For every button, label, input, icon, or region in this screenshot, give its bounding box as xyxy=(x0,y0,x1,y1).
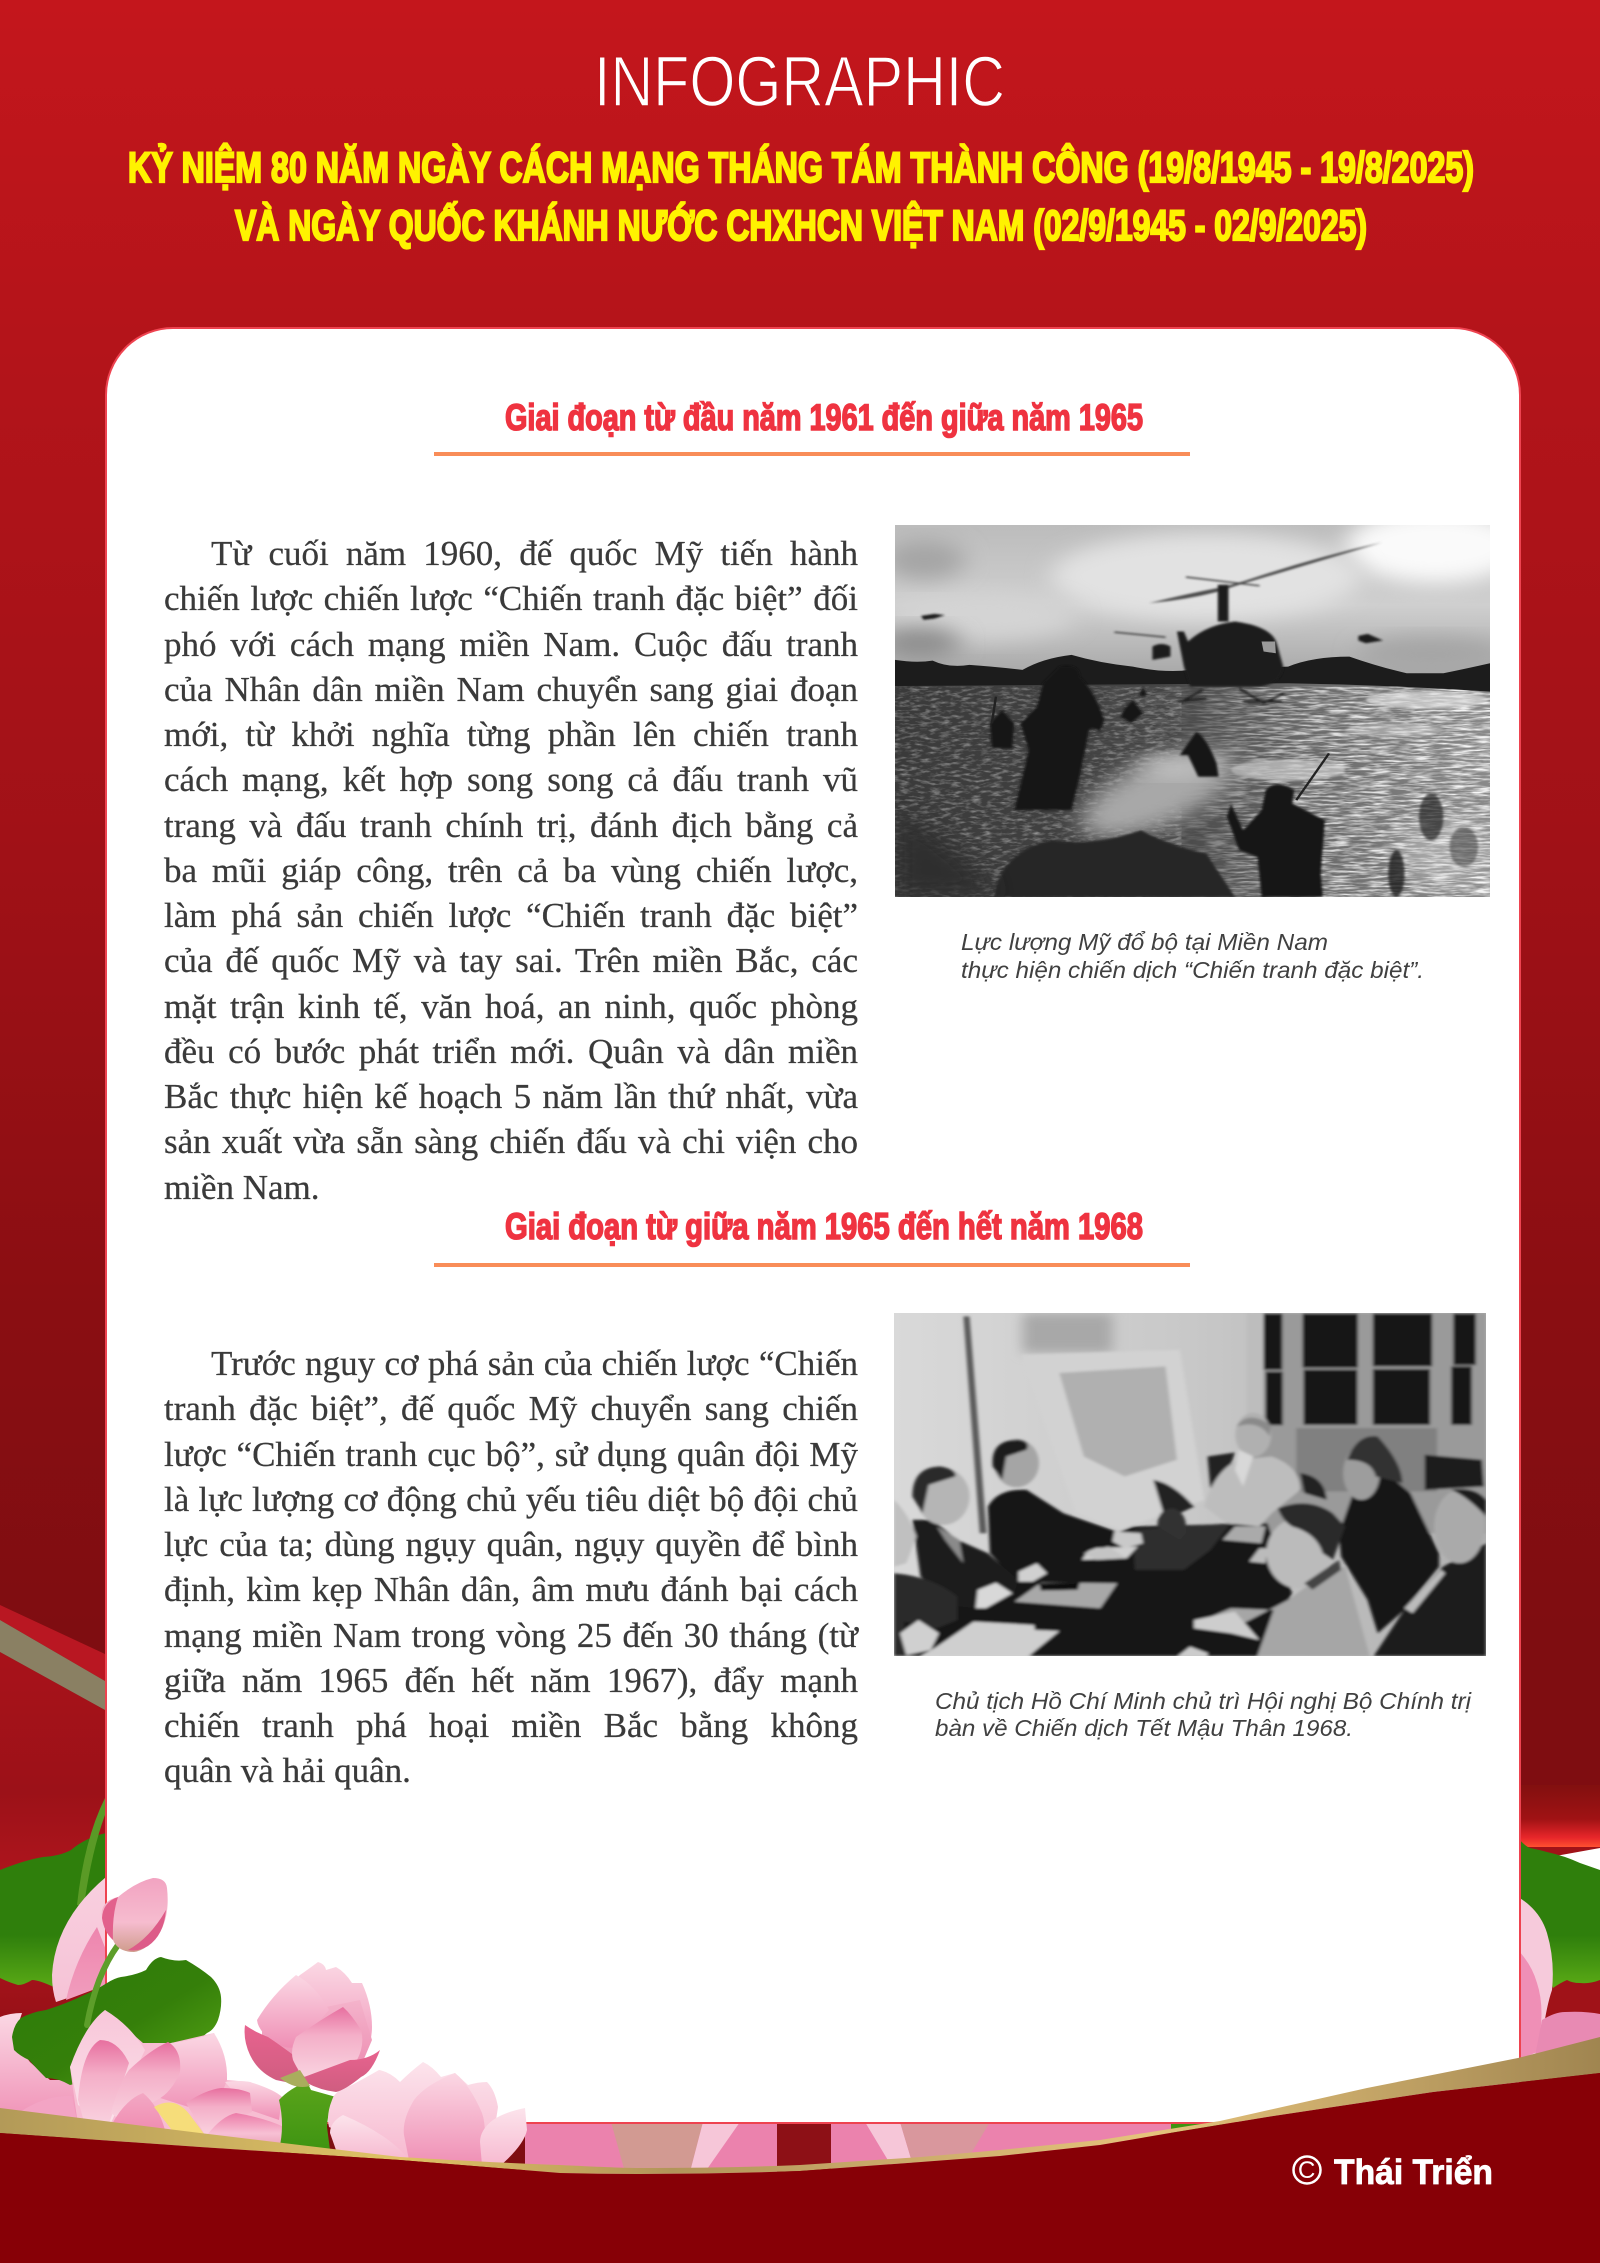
text block: section 2 body: Trước nguy cơ phá sản của chiến lược “Chiến xyxy=(211,1344,858,1383)
text block: section 2 body: là lực lượng cơ động chủ yếu tiêu diệt bộ đội chủ xyxy=(164,1480,858,1519)
footer: dark red base xyxy=(0,2073,1600,2263)
text block: section 1 body: đều có bước phát triển mới. Quân và dân miền xyxy=(164,1032,858,1071)
text block: section 2 body: quân và hải quân. xyxy=(164,1751,411,1790)
icon: lotus bud xyxy=(102,1878,168,1952)
back left stem xyxy=(77,1798,105,1905)
back left petal xyxy=(52,1877,106,2002)
ribbon: left red stripe xyxy=(0,1605,105,1681)
text block: section 1 body: mới, từ khởi nghĩa từng phần lên chiến tranh xyxy=(164,715,858,754)
left man xyxy=(988,1490,1117,1583)
soldiers xyxy=(990,666,1325,897)
text block: section 1 body: ba mũi giáp công, trên cả ba vùng chiến lược, xyxy=(164,851,858,890)
right leaf xyxy=(1518,1838,1600,1988)
text block: section 1 body: làm phá sản chiến lược “Chiến tranh đặc biệt” xyxy=(164,896,858,935)
text block: section 2 body: lược “Chiến tranh cục bộ”, sử dụng quân đội Mỹ xyxy=(164,1434,858,1474)
icon: standing lotus flower xyxy=(245,1962,380,2092)
main helicopter xyxy=(921,542,1383,703)
right glow xyxy=(1519,1785,1600,1847)
front man xyxy=(1194,1567,1370,1656)
credit: copyright Thái Triển: C xyxy=(1298,2157,1315,2184)
caption: photo 1: Lực lượng Mỹ đổ bộ tại Miền Nam xyxy=(961,929,1328,955)
text block: section 2 body: mạng miền Nam trong vòng 25 đến 30 tháng (từ xyxy=(164,1616,858,1654)
text block: section 1 body: của đế quốc Mỹ và tay sai. Trên miền Bắc, các xyxy=(164,941,858,980)
table xyxy=(894,1523,1292,1656)
text block: section 1 body: phó với cách mạng miền Nam. Cuộc đấu tranh xyxy=(164,624,858,664)
text block: section 1 body: cách mạng, kết hợp song song cả đấu tranh vũ xyxy=(164,760,858,799)
gold curved band xyxy=(0,2037,1600,2174)
text block: section 1 body: mặt trận kinh tế, văn hoá, an ninh, quốc phòng xyxy=(164,986,858,1026)
ribbon: left gold stripe xyxy=(0,1620,105,1710)
icon: lower right lotus flower xyxy=(328,2062,527,2166)
back left leaf xyxy=(0,1833,106,1990)
Ho xyxy=(1204,1456,1300,1527)
caption: photo 2: bàn về Chiến dịch Tết Mậu Thân 1968. xyxy=(935,1715,1353,1741)
text block: section 2 body: giữa năm 1965 đến hết năm 1967), đẩy mạnh xyxy=(164,1661,858,1700)
far-left man xyxy=(894,1500,916,1567)
text block: section 2 body xyxy=(164,1344,859,1790)
caption: photo 1: thực hiện chiến dịch “Chiến tranh đặc biệt”. xyxy=(961,957,1424,983)
caption: photo 2: Chủ tịch Hồ Chí Minh chủ trì Hội nghị Bộ Chính trị xyxy=(935,1688,1472,1714)
papers xyxy=(1014,1583,1117,1608)
text block: section 2 body: chiến tranh phá hoại miền Bắc bằng không xyxy=(164,1706,858,1745)
credit: copyright Thái Triển: Thái Triển xyxy=(1334,2153,1493,2192)
text block: section 1 body: sản xuất vừa sẵn sàng chiến đấu và chi viện cho xyxy=(164,1122,858,1161)
panel: white content card xyxy=(105,327,1521,2124)
text block: section 1 body: Từ cuối năm 1960, đế quốc Mỹ tiến hành xyxy=(211,534,858,573)
text block: section 1 body: miền Nam. xyxy=(164,1168,320,1206)
icon: lotus bud stem xyxy=(87,1945,118,2025)
photo: Politburo meeting xyxy=(894,1313,1486,1656)
icon: main left lotus flower xyxy=(20,2010,284,2155)
heading: section 2: Giai đoạn từ giữa năm 1965 đến hết năm 1968 xyxy=(505,1206,1143,1247)
text block: section 1 body: trang và đấu tranh chính trị, đánh địch bằng cả xyxy=(164,806,858,844)
text block: section 1 body xyxy=(164,534,858,1206)
text block: section 1 body: chiến lược chiến lược “Chiến tranh đặc biệt” đối xyxy=(164,579,858,618)
heading: section 1: Giai đoạn từ đầu năm 1961 đến giữa năm 1965 xyxy=(505,397,1143,438)
left lower panel xyxy=(0,1652,105,2120)
text block: section 2 body: tranh đặc biệt”, đế quốc Mỹ chuyển sang chiến xyxy=(164,1389,858,1428)
text block: section 2 body: định, kìm kẹp Nhân dân, âm mưu đánh bại cách xyxy=(164,1570,858,1609)
icon: leaf under standing lotus xyxy=(279,2082,336,2150)
petal strip under card xyxy=(525,2122,1225,2178)
text block: section 1 body: của Nhân dân miền Nam chuyển sang giai đoạn xyxy=(164,670,858,709)
woman xyxy=(1339,1476,1439,1633)
right petal xyxy=(1518,1897,1553,2060)
text block: section 2 body: lực của ta; dùng ngụy quân, ngụy quyền để bình xyxy=(164,1525,858,1564)
second man xyxy=(912,1520,1019,1608)
icon: far-left lotus petals xyxy=(0,2013,82,2125)
photo: helicopter landing xyxy=(895,525,1490,897)
title: INFOGRAPHIC: INFOGRAPHIC xyxy=(594,43,1005,122)
white streak xyxy=(1550,1848,1600,1872)
icon: round lotus leaf xyxy=(12,1957,221,2085)
far-right man xyxy=(1374,1543,1486,1656)
text block: section 1 body: Bắc thực hiện kế hoạch 5 năm lần thứ nhất, vừa xyxy=(164,1077,858,1116)
